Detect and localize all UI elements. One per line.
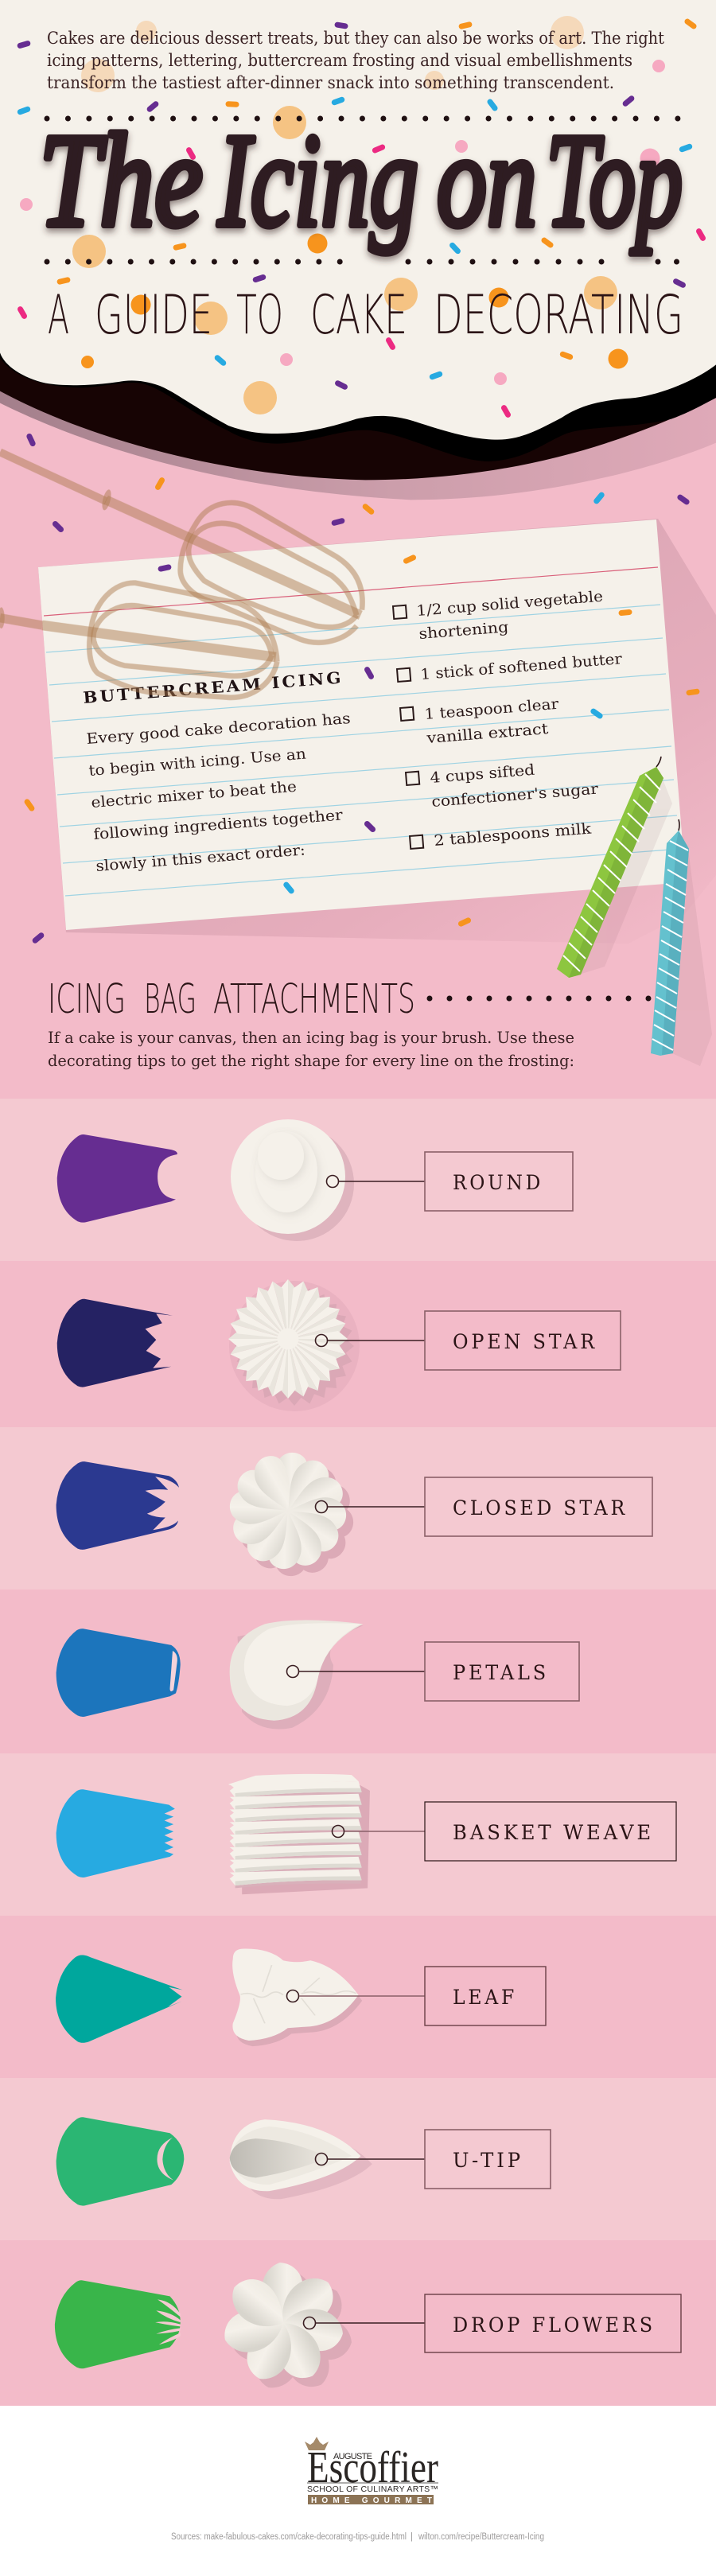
row: round: [57, 1119, 573, 1241]
logo: Escoffier: [307, 2443, 438, 2492]
nozzle: basket weave: [56, 1789, 175, 1878]
section intro text: If a cake is your canvas, then an icing bag is your brush. Use these: [48, 1028, 574, 1047]
section heading: icing bag attachments: ATTACHMENTS: [213, 976, 415, 1023]
subtitle: [48, 284, 683, 347]
section heading: icing bag attachments: [48, 976, 415, 1023]
card instructions: [86, 710, 351, 875]
frosting: closed star: [228, 1450, 356, 1578]
pointer: petals: [286, 1666, 425, 1677]
label: u-tip: [425, 2130, 551, 2189]
label: leaf: LEAF: [453, 1986, 517, 2009]
label: closed star: CLOSED STAR: [453, 1496, 628, 1520]
title: The: [39, 107, 203, 255]
title: [39, 107, 683, 255]
subtitle: TO: [236, 284, 283, 347]
row: petals: [56, 1620, 579, 1730]
sources: wilton.com/recipe/Buttercream-Icing: [418, 2532, 544, 2542]
header confetti dots and sprinkles: [20, 16, 703, 444]
heading dotted rule: [430, 996, 652, 1001]
frosting: basket weave: [228, 1774, 370, 1894]
candle shadows: [579, 777, 712, 1066]
nozzle: closed star: [56, 1461, 179, 1550]
ingredient checklist: vanilla extract: [426, 721, 550, 747]
card shadow: [38, 519, 716, 944]
card instructions: to begin with icing. Use an: [88, 746, 307, 780]
row: drop flowers: [55, 2263, 681, 2395]
subtitle: GUIDE: [95, 284, 212, 347]
logo: SCHOOL OF CULINARY ARTS™: [307, 2485, 438, 2494]
nozzle: petals: [56, 1628, 181, 1717]
frosting: round: [231, 1119, 354, 1241]
pointer: closed star: [315, 1500, 425, 1513]
label: basket weave: BASKET WEAVE: [453, 1821, 654, 1844]
frosting: u-tip: [230, 2119, 372, 2199]
label: petals: [425, 1642, 579, 1701]
ingredient checklist: 1 stick of softened butter: [420, 651, 623, 683]
ingredient checklist: confectioner's sugar: [431, 781, 599, 811]
card heading: BUTTERCREAM ICING: [83, 667, 344, 707]
pointer: open star: [315, 1335, 425, 1346]
section intro text: [48, 1028, 574, 1070]
nozzle: drop flowers: [55, 2280, 181, 2368]
ingredient checklist: 1 teaspoon clear: [424, 696, 559, 723]
nozzle: round: [57, 1134, 177, 1223]
section intro text: decorating tips to get the right shape for every line on the frosting:: [48, 1051, 574, 1070]
label: round: ROUND: [453, 1171, 543, 1194]
label: petals: PETALS: [453, 1661, 549, 1684]
title: Icing: [217, 107, 418, 255]
section heading: icing bag attachments: BAG: [144, 976, 197, 1023]
green candle: [557, 757, 663, 978]
logo: AUGUSTE: [333, 2452, 372, 2461]
icon: crown: [305, 2437, 329, 2450]
logo: HOME GOURMET: [311, 2496, 432, 2505]
nozzle: leaf: [56, 1955, 183, 2043]
row: leaf: [56, 1949, 546, 2046]
label: open star: [425, 1311, 621, 1370]
subtitle: CAKE: [310, 284, 407, 347]
sources: |: [411, 2532, 413, 2542]
sources: Sources: make-fabulous-cakes.com/cake-decorating-tips-guide.html: [171, 2532, 407, 2542]
row: closed star: [56, 1450, 652, 1578]
logo: [305, 2437, 438, 2505]
recipe card: [38, 519, 686, 930]
pointer: u-tip: [315, 2153, 425, 2165]
dotted rules around title: [47, 119, 678, 262]
ingredient checklist: [393, 589, 623, 850]
row bands: [0, 1099, 716, 2240]
row: basket weave: [56, 1774, 676, 1894]
card instructions: following ingredients together: [93, 807, 344, 843]
intro paragraph: icing patterns, lettering, buttercream frosting and visual embellishments: [47, 51, 632, 70]
frosting: petals: [230, 1620, 363, 1730]
frosting: leaf: [232, 1949, 362, 2046]
intro paragraph: [47, 29, 665, 92]
label: u-tip: U-TIP: [453, 2149, 523, 2172]
card instructions: Every good cake decoration has: [86, 710, 351, 748]
pointer: drop flowers: [304, 2317, 425, 2329]
blue candle: [651, 819, 689, 1056]
section heading: icing bag attachments: ICING: [48, 976, 126, 1023]
label: drop flowers: DROP FLOWERS: [453, 2313, 656, 2337]
pointer: leaf: [286, 1990, 425, 2002]
intro paragraph: Cakes are delicious dessert treats, but they can also be works of art. The right: [47, 29, 665, 48]
ingredient checklist: 2 tablespoons milk: [434, 820, 593, 850]
label: basket weave: [425, 1802, 676, 1861]
label: leaf: [425, 1967, 546, 2025]
label: open star: OPEN STAR: [453, 1330, 597, 1353]
label: closed star: [425, 1477, 652, 1536]
sprinkles over card: [27, 481, 697, 940]
pointer: basket weave: [333, 1825, 425, 1838]
subtitle: A: [48, 284, 69, 347]
card instructions: electric mixer to beat the: [91, 779, 298, 811]
footer background: [0, 2406, 716, 2576]
cake top with dripping icing: [0, 0, 716, 500]
label: round: [425, 1152, 573, 1211]
row: open star: [57, 1279, 621, 1411]
card instructions: slowly in this exact order:: [95, 842, 306, 875]
label: drop flowers: [425, 2294, 681, 2352]
frosting: open star: [228, 1279, 360, 1411]
intro paragraph: transform the tastiest after-dinner snack into something transcendent.: [47, 73, 614, 92]
nozzle: open star: [57, 1299, 173, 1387]
ingredient checklist: 4 cups sifted: [430, 762, 535, 787]
frosting: drop flowers: [220, 2263, 356, 2395]
pointer: round: [326, 1176, 425, 1187]
ingredient checklist: shortening: [418, 619, 509, 643]
title: on: [437, 107, 537, 255]
whisks: [0, 452, 363, 698]
ingredient checklist: 1/2 cup solid vegetable: [416, 589, 604, 620]
nozzle: u-tip: [56, 2117, 184, 2206]
row: u-tip: [56, 2117, 551, 2206]
